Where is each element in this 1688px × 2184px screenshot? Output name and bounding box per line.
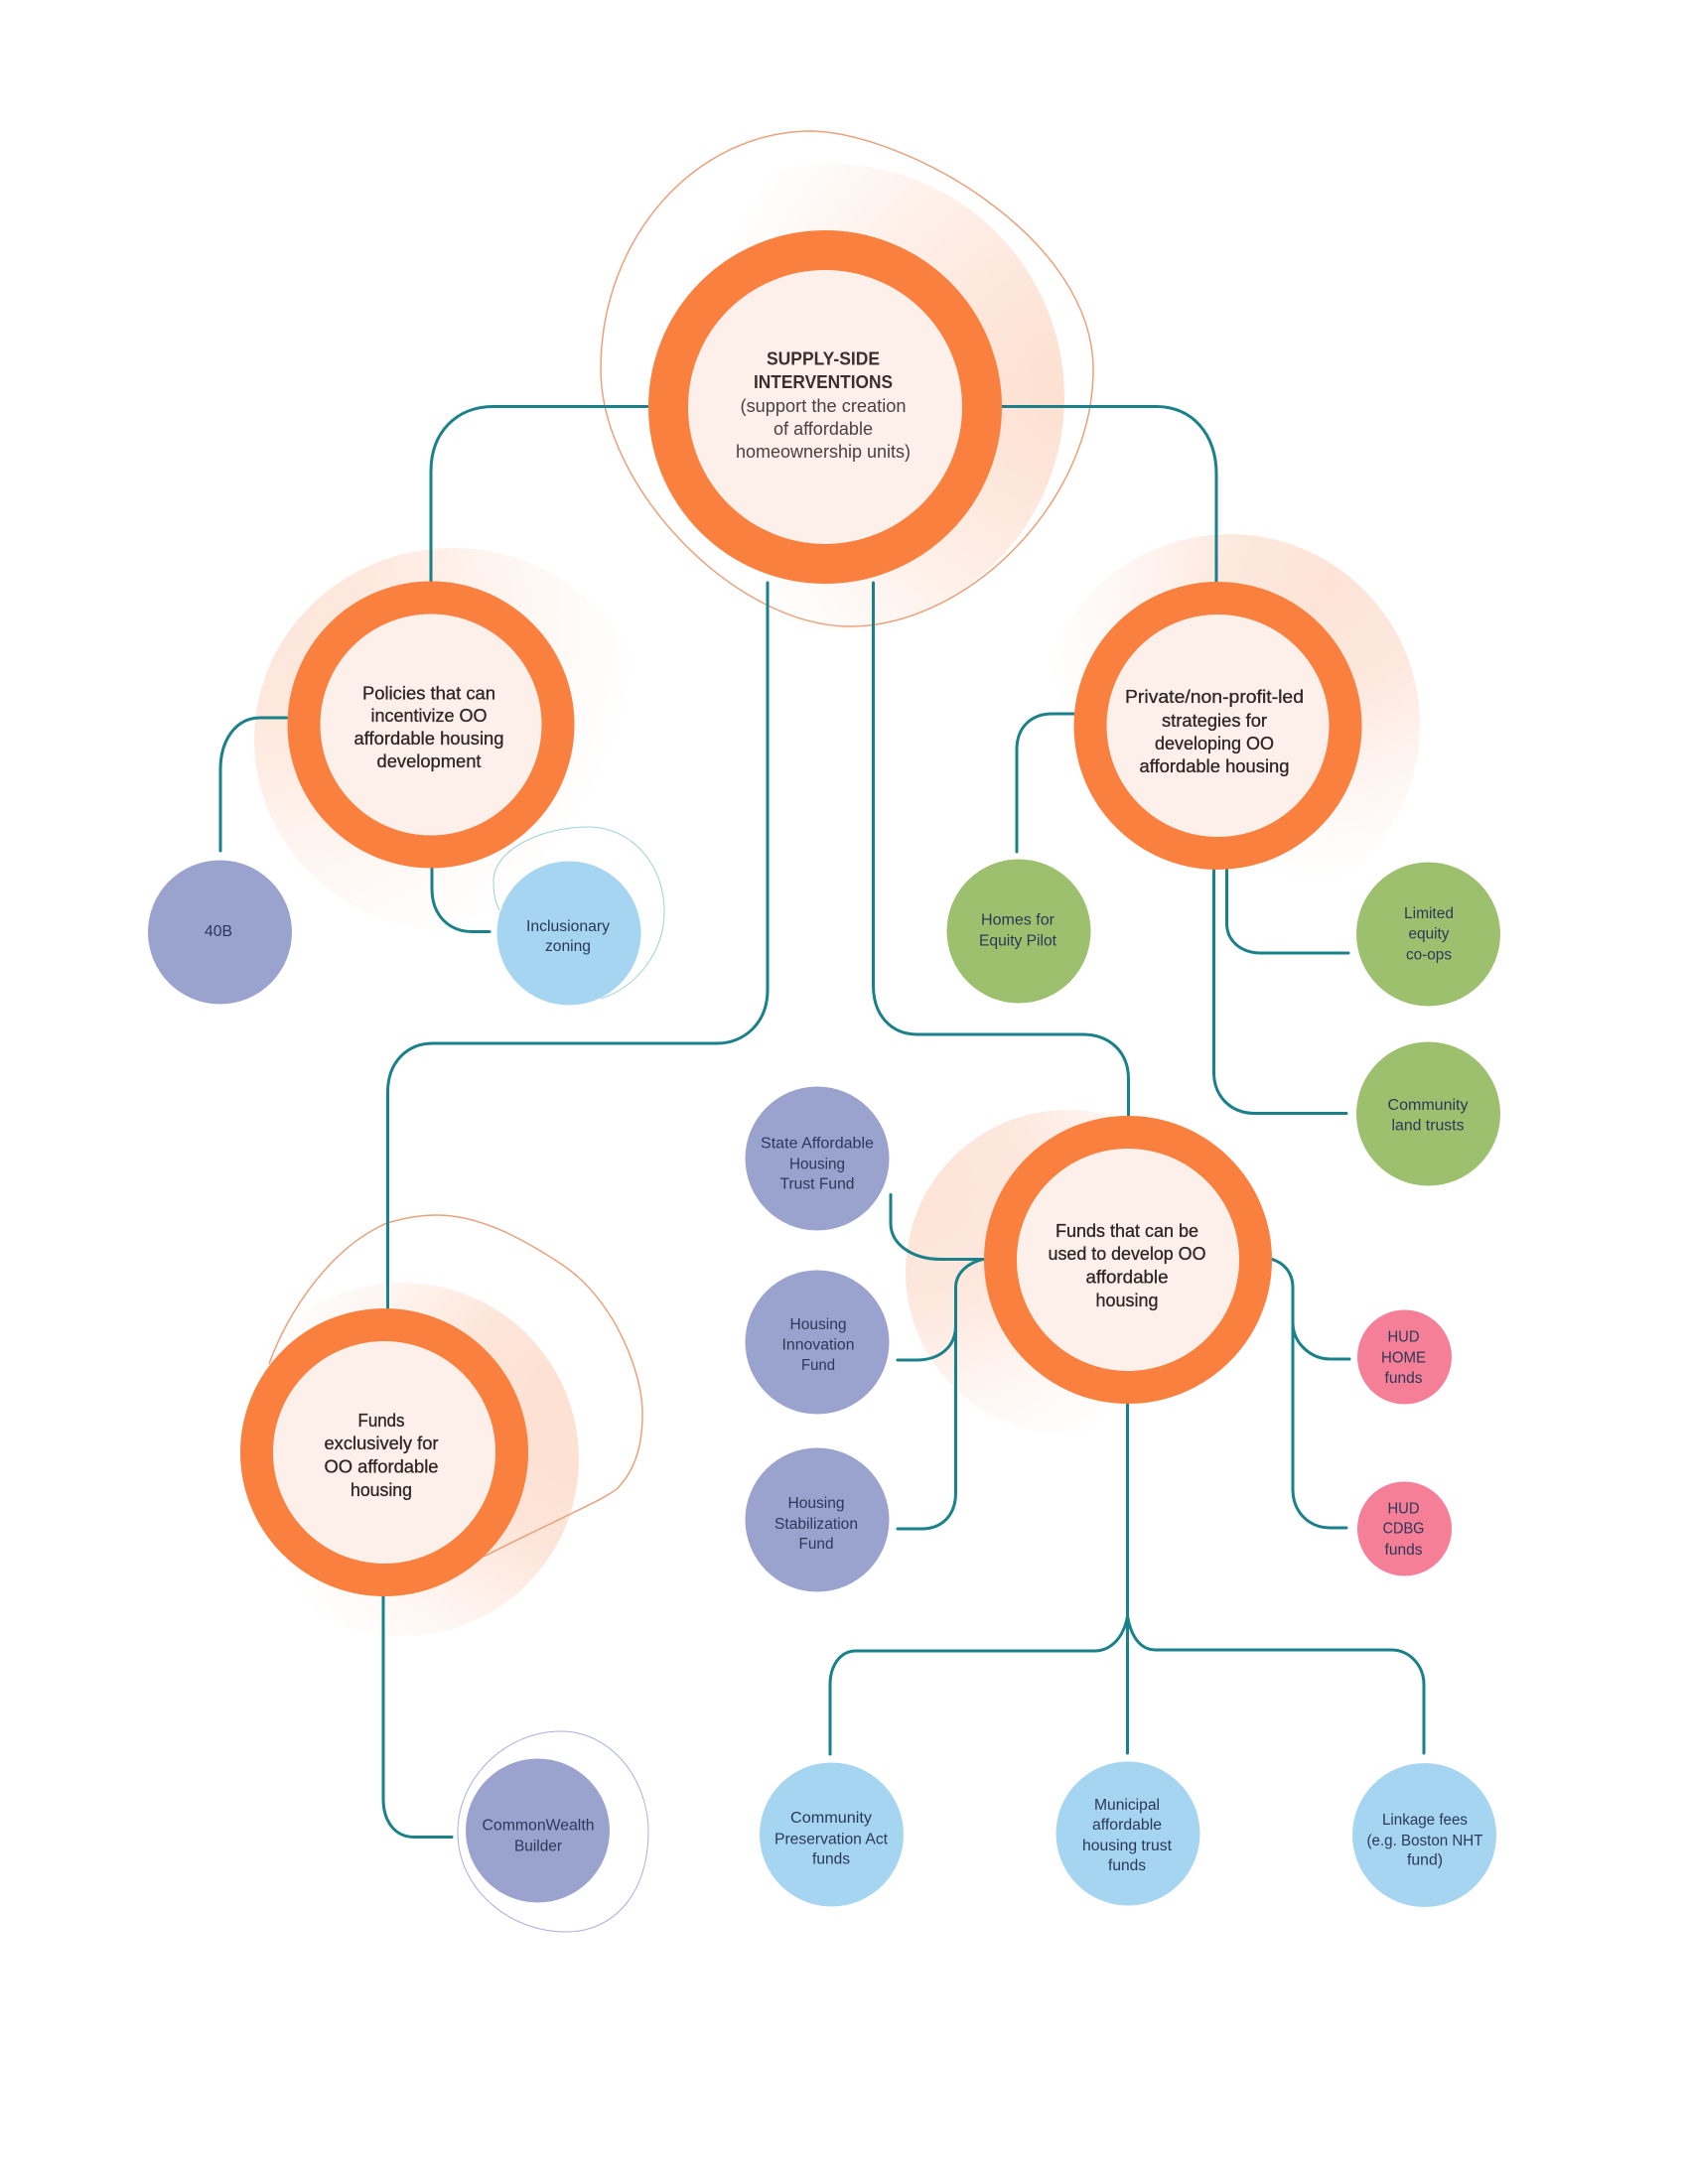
- leaf: HUD CDBG funds: HUD: [1388, 1501, 1420, 1517]
- node: funds to develop OO: housing: [1096, 1291, 1158, 1310]
- node: private/non-profit strategies: [1090, 598, 1345, 854]
- leaf: community preservation act funds: Community: [790, 1810, 872, 1827]
- leaf: linkage fees: [1352, 1763, 1496, 1907]
- node: funds exclusively for OO: housing: [351, 1480, 412, 1500]
- node: private/non-profit strategies: developing OO: [1155, 734, 1274, 753]
- leaf: municipal affordable housing trust funds: funds: [1108, 1857, 1146, 1874]
- leaf: housing stabilization fund: Stabilization: [774, 1516, 858, 1533]
- node: private/non-profit strategies: strategies for: [1162, 711, 1267, 731]
- leaf: limited equity co-ops: [1356, 862, 1500, 1007]
- leaf: municipal affordable housing trust funds: housing trust: [1082, 1838, 1173, 1854]
- node: policies: incentivize OO: [371, 706, 487, 726]
- leaf: HUD HOME funds: HUD: [1388, 1328, 1420, 1346]
- leaf: community land trusts: [1356, 1042, 1500, 1185]
- leaf: housing innovation fund: Innovation: [782, 1336, 854, 1354]
- leaf: commonwealth builder: Builder: [514, 1839, 562, 1854]
- node: funds to develop OO: affordable: [1086, 1267, 1168, 1287]
- leaf: community land trusts: Community: [1388, 1097, 1469, 1114]
- leaf: linkage fees: fund): [1407, 1852, 1443, 1868]
- leaf: linkage fees: Linkage fees: [1382, 1812, 1468, 1829]
- leaf: community preservation act funds: [760, 1763, 904, 1906]
- leaf: housing stabilization fund: [745, 1447, 890, 1592]
- leaf: homes for equity pilot: Homes for: [981, 911, 1055, 929]
- leaf: housing innovation fund: Housing: [790, 1316, 846, 1333]
- node: private/non-profit strategies: Private/non-profit-led: [1125, 687, 1304, 707]
- node: funds to develop OO: used to develop OO: [1049, 1244, 1205, 1264]
- leaf: HUD HOME funds: funds: [1384, 1370, 1423, 1387]
- leaf: HUD HOME funds: [1357, 1310, 1452, 1404]
- leaf: municipal affordable housing trust funds: [1056, 1761, 1199, 1906]
- node: funds exclusively for OO: [256, 1324, 512, 1580]
- leaf: HUD CDBG funds: CDBG: [1382, 1521, 1424, 1537]
- node: funds exclusively for OO: Funds: [357, 1411, 405, 1431]
- node: funds exclusively for OO: exclusively for: [324, 1433, 439, 1453]
- leaf: community preservation act funds: funds: [812, 1850, 850, 1868]
- leaf: inclusionary zoning: zoning: [545, 938, 591, 955]
- node: funds to develop OO: Funds that can be: [1055, 1221, 1198, 1241]
- leaf: homes for equity pilot: Equity Pilot: [979, 933, 1057, 949]
- leaf: commonwealth builder: [466, 1759, 610, 1902]
- leaf: municipal affordable housing trust funds: affordable: [1092, 1817, 1162, 1834]
- leaf: housing innovation fund: Fund: [801, 1357, 835, 1374]
- leaf: state affordable housing trust fund: Trust Fund: [780, 1175, 854, 1193]
- node: supply-side interventions: homeownership units): [736, 442, 911, 462]
- node: policies: Policies that can: [362, 683, 495, 703]
- leaf: inclusionary zoning: [496, 862, 641, 1005]
- leaf: inclusionary zoning: Inclusionary: [526, 918, 610, 935]
- node: supply-side interventions: (support the creation: [741, 396, 906, 416]
- leaf: state affordable housing trust fund: State Affordable: [761, 1136, 874, 1152]
- leaf: limited equity co-ops: Limited: [1404, 905, 1454, 922]
- leaf: housing stabilization fund: Housing: [788, 1495, 844, 1512]
- leaf: state affordable housing trust fund: Housing: [789, 1156, 845, 1173]
- leaf: limited equity co-ops: co-ops: [1406, 947, 1452, 963]
- node: supply-side interventions: [668, 250, 982, 564]
- leaf: community land trusts: land trusts: [1392, 1118, 1465, 1134]
- node: policies: affordable housing: [353, 729, 504, 749]
- node: supply-side interventions: INTERVENTIONS: [754, 372, 893, 392]
- leaf: homes for equity pilot: [947, 860, 1090, 1003]
- leaf: HUD HOME funds: HOME: [1381, 1350, 1426, 1366]
- connector lines: [220, 407, 1424, 1837]
- leaf: state affordable housing trust fund: [745, 1086, 890, 1231]
- node: supply-side interventions: SUPPLY-SIDE: [767, 349, 880, 369]
- leaf: 40B: [148, 860, 292, 1005]
- leaf: commonwealth builder: CommonWealth: [483, 1817, 594, 1835]
- leaf: housing stabilization fund: Fund: [798, 1536, 834, 1553]
- node: policies: development: [377, 751, 481, 771]
- leaf: 40B: 40B: [205, 923, 232, 940]
- leaf: municipal affordable housing trust funds: Municipal: [1094, 1797, 1160, 1814]
- node: supply-side interventions: of affordable: [774, 419, 873, 439]
- leaf: HUD CDBG funds: funds: [1384, 1542, 1423, 1559]
- node: private/non-profit strategies: affordable housing: [1140, 756, 1289, 776]
- leaf: HUD CDBG funds: [1357, 1481, 1452, 1576]
- node: funds exclusively for OO: OO affordable: [324, 1457, 439, 1477]
- leaf: community preservation act funds: Preservation Act: [774, 1831, 889, 1848]
- leaf: housing innovation fund: [745, 1271, 890, 1414]
- leaf: limited equity co-ops: equity: [1408, 925, 1450, 943]
- node: policies: [304, 598, 558, 852]
- thin outline blobs around circles: [269, 131, 1093, 1932]
- leaf: linkage fees: (e.g. Boston NHT: [1366, 1833, 1483, 1849]
- node: funds to develop OO: [1001, 1132, 1255, 1388]
- background glows behind the main circles: [225, 164, 1420, 1636]
